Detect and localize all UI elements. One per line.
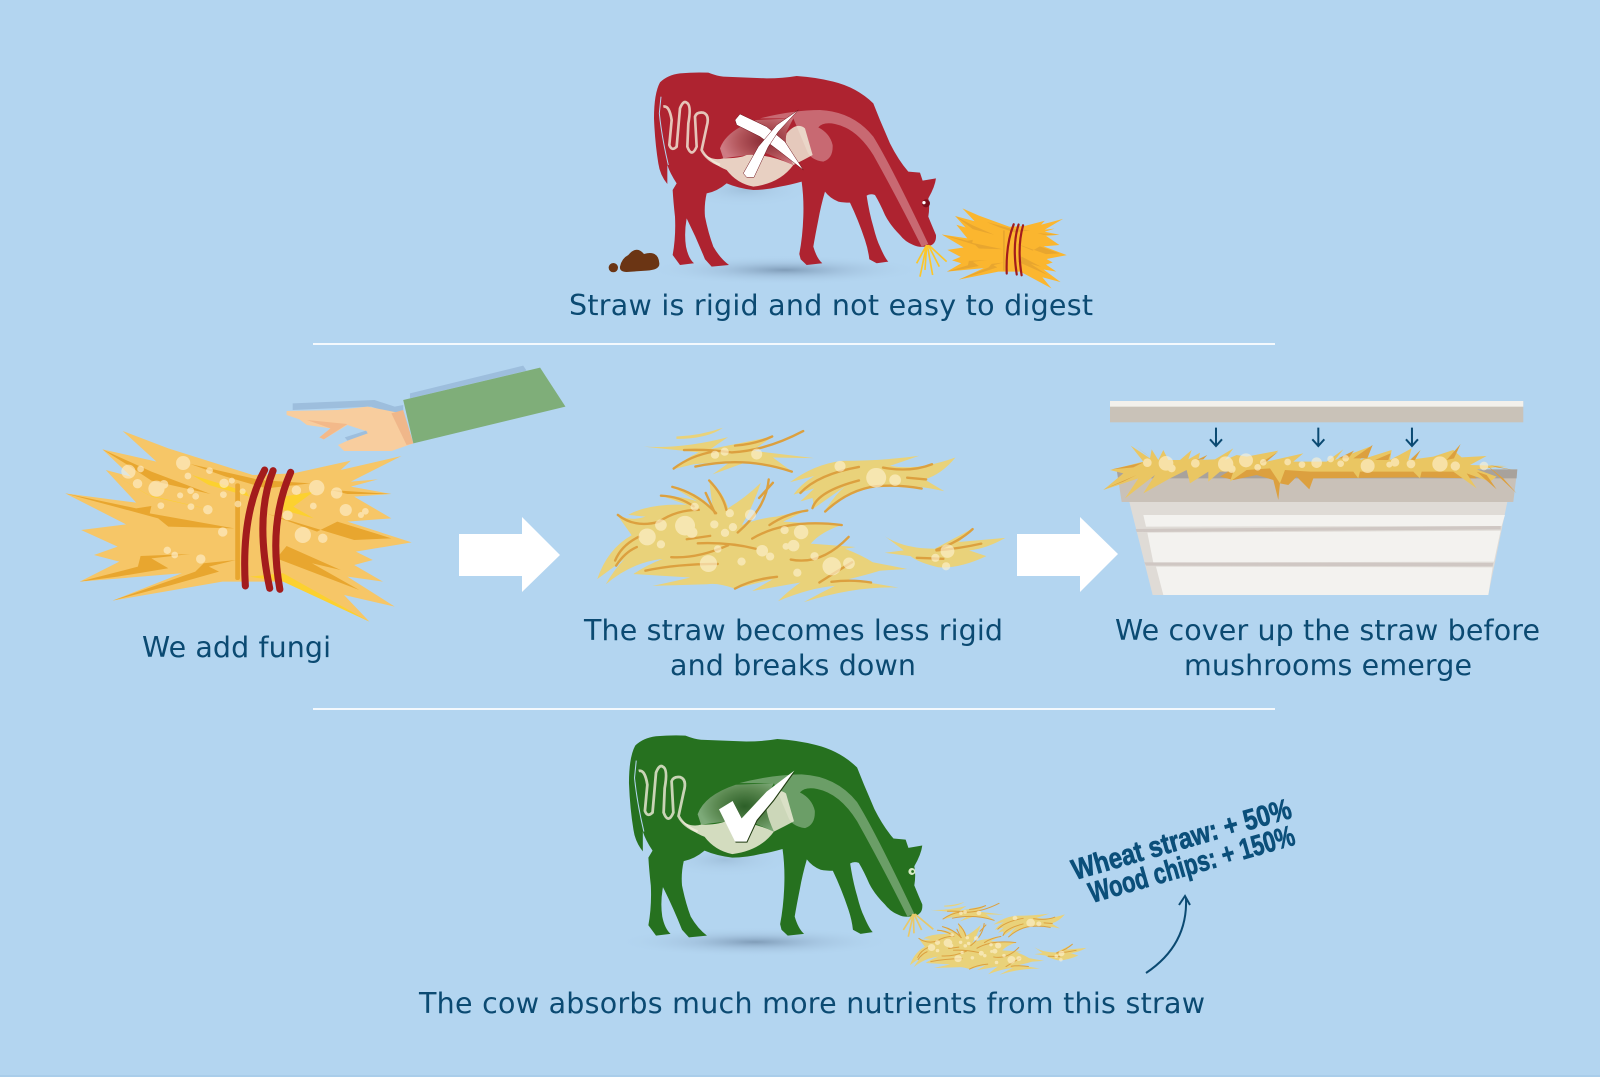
small broken straw pile <box>910 902 1087 975</box>
caption: straw is rigid: Straw is rigid and not easy to digest <box>569 289 1093 322</box>
caption: straw becomes less rigid: and breaks down <box>670 649 916 682</box>
arrow: step one to two <box>459 517 560 592</box>
hand adding fungi <box>287 366 565 451</box>
fungi spots on crate straw <box>1143 453 1488 473</box>
green cow illustration: absorbs more nutrients <box>615 735 1087 975</box>
red cow illustration: straw is hard to digest <box>609 72 1067 288</box>
nutrient gain callout: Wheat straw: + 50% <box>1068 793 1295 887</box>
cow silhouette with digestive tract <box>629 735 922 937</box>
caption: straw becomes less rigid: The straw becomes less rigid <box>583 614 1003 647</box>
fungi spots <box>121 456 369 564</box>
bundle ties <box>245 470 291 589</box>
cow silhouette with digestive tract <box>654 72 947 277</box>
caption: we cover up the straw: We cover up the straw before <box>1115 614 1540 647</box>
caption: cow absorbs more nutrients: The cow absorbs much more nutrients from this straw <box>418 987 1205 1020</box>
large straw bundle with fungi <box>65 431 412 622</box>
caption: we cover up the straw: mushrooms emerge <box>1184 649 1472 682</box>
crate body <box>1117 469 1517 595</box>
shadow under red cow <box>645 172 925 285</box>
straw in mouth <box>903 914 933 937</box>
crate lid <box>1110 401 1523 422</box>
arrow: step two to three <box>1017 517 1118 592</box>
caption: we cover up the straw <box>1115 614 1540 682</box>
covered crate with straw <box>1103 401 1523 595</box>
curved arrow to callout <box>1146 896 1190 973</box>
divider top <box>313 343 1275 345</box>
shadow under green cow <box>615 842 895 957</box>
nutrient gain callout: Wood chips: + 150% <box>1085 820 1299 910</box>
straw on crate <box>1103 444 1517 500</box>
icon: white cross <box>735 110 803 177</box>
small straw bundle <box>942 208 1067 288</box>
caption: straw becomes less rigid <box>583 614 1003 682</box>
icon: white check mark <box>719 771 795 843</box>
caption: we add fungi: We add fungi <box>142 631 331 664</box>
down arrows <box>1210 428 1418 446</box>
nutrient gain callout <box>1068 793 1299 910</box>
broken down straw pile <box>597 428 1005 602</box>
divider bottom <box>313 708 1275 710</box>
icon: manure <box>609 250 659 272</box>
